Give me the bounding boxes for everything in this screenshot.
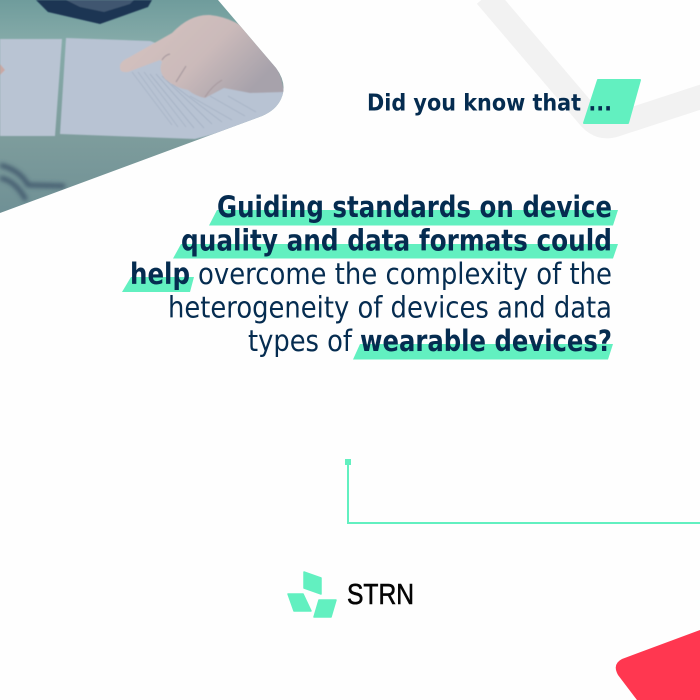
highlight: line 1 [209,210,618,226]
main statement with highlights [122,190,618,360]
text: line 5 bold: wearable devices? [360,324,612,358]
glasses [0,165,65,200]
logo: STRN [288,572,414,617]
hand [120,15,284,98]
logo wordmark: STRN [347,579,414,611]
decorative grey chevron line [486,0,700,126]
document: left page [0,39,62,136]
decorative red corner shape [616,628,700,700]
heading: did you know that: Did you know that ... [367,88,612,116]
highlight: line 2 [173,244,618,258]
connector line [345,459,700,523]
icon: logo mark [288,572,336,617]
text: line 4: heterogeneity of devices and data [168,291,612,325]
text: line 3 regular: overcome the complexity of the [198,257,612,291]
icon: calculator [36,0,152,24]
text: line 1: Guiding standards on device [217,190,612,224]
highlight: help [122,277,194,292]
text: line 2: quality and data formats could [181,224,612,258]
text: line 5 regular: types of [248,324,353,358]
text: line 3 bold: help [130,257,190,291]
photo: hand pointing at documents [0,0,290,215]
document: right page [60,38,290,139]
tag: did you know highlight [584,80,640,123]
highlight: wearable devices [353,344,613,360]
